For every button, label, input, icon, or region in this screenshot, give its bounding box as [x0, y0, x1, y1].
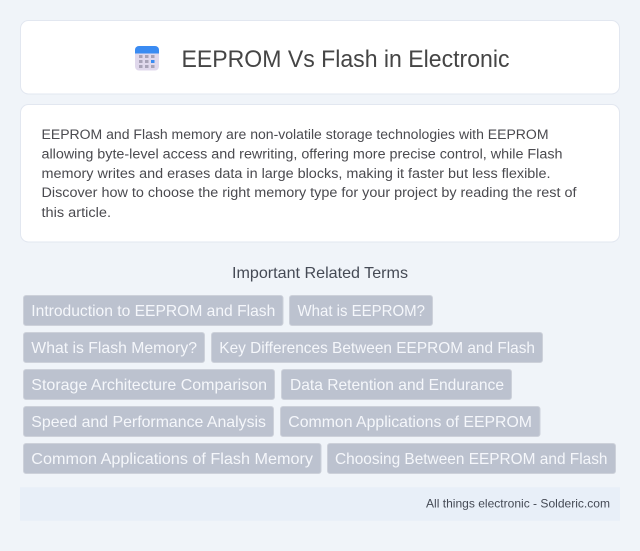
- tag: speed and performance: [24, 406, 274, 436]
- footer credit: All things electronic - Solderic.com: [426, 496, 610, 510]
- text block: description: memory writes and erases data in large blocks, making it faster but less flexible.: [42, 166, 550, 182]
- heading: important related terms: Important Related Terms: [232, 265, 408, 282]
- tag: introduction: [24, 296, 283, 326]
- title: EEPROM Vs Flash in Electronic: [182, 46, 510, 73]
- tag: applications of flash: [24, 444, 321, 474]
- tag: what is EEPROM: [290, 296, 432, 326]
- tag: data retention: Data Retention and Endurance: [290, 377, 504, 394]
- icon: calendar grid: [135, 46, 159, 70]
- text block: description: this article.: [42, 205, 111, 221]
- tag: applications of flash: Common Applications of Flash Memory: [31, 451, 313, 468]
- tag: data retention: [282, 370, 512, 400]
- tag: choosing between: Choosing Between EEPROM and Flash: [335, 451, 608, 468]
- tag: applications of EEPROM: Common Applications of EEPROM: [288, 414, 532, 431]
- tag: storage architecture: Storage Architecture Comparison: [31, 377, 267, 394]
- tag: key differences: Key Differences Between EEPROM and Flash: [219, 340, 535, 357]
- tag list: related terms: [24, 296, 616, 474]
- tag: applications of EEPROM: [280, 406, 540, 436]
- panel: header card: [20, 20, 620, 94]
- tag: what is flash memory: What is Flash Memory?: [31, 340, 197, 357]
- panel: description card: [20, 104, 620, 242]
- text block: description: allowing byte-level access and rewriting, offering more precise control, while Flash: [42, 146, 562, 162]
- text block: description: EEPROM and Flash memory are non-volatile storage technologies with EEPROM: [42, 127, 548, 143]
- tag: what is EEPROM: What is EEPROM?: [298, 303, 425, 320]
- footer bar: [20, 487, 620, 521]
- tag: choosing between: [328, 444, 616, 474]
- tag: what is flash memory: [24, 332, 204, 362]
- text block: description: [42, 127, 577, 221]
- text block: description: Discover how to choose the right memory type for your project by reading the rest of: [42, 185, 577, 201]
- tag: key differences: [212, 332, 542, 362]
- tag: introduction: Introduction to EEPROM and Flash: [31, 303, 275, 320]
- tag: storage architecture: [24, 370, 274, 400]
- tag: speed and performance: Speed and Performance Analysis: [31, 414, 266, 431]
